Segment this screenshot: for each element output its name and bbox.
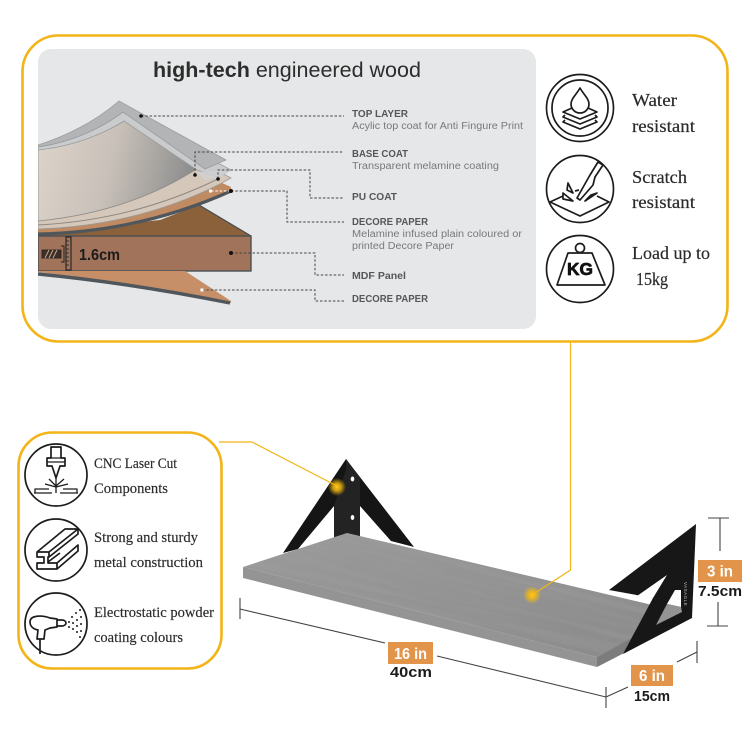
- panel: wood and resistance features: [22, 36, 728, 342]
- dimension label: 1.6cm: [79, 247, 120, 264]
- layer labels: Melamine infused plain coloured or: [352, 229, 523, 240]
- layer labels: BASE COAT: [352, 149, 408, 160]
- dimension: depth: [606, 641, 697, 705]
- layer labels: MDF Panel: [352, 271, 406, 282]
- highlight: bracket hotspot: [328, 478, 346, 496]
- text: water resistant: resistant: [632, 116, 695, 136]
- left bracket: [283, 459, 414, 553]
- dimension: length: [240, 598, 606, 708]
- icon: CNC laser: [25, 444, 87, 506]
- dimension: depth: 15cm: [634, 688, 670, 705]
- text: CNC laser cut: [94, 456, 177, 497]
- text: load capacity: Load up to: [632, 243, 710, 263]
- text: CNC laser cut: Components: [94, 481, 168, 497]
- text: load capacity: [632, 243, 710, 289]
- layer labels: [352, 109, 523, 305]
- connector: wood panel to shelf: [532, 342, 570, 595]
- icon: powder coating gun: [25, 593, 87, 655]
- text: strong and sturdy: Strong and sturdy: [94, 530, 199, 546]
- icon: load weight: KG: [567, 259, 593, 279]
- text: CNC laser cut: CNC Laser Cut: [94, 456, 177, 472]
- dimension: length: 16 in: [394, 646, 427, 663]
- diagram: wood layers cross-section: [38, 101, 251, 303]
- text: scratch resistant: [632, 167, 695, 212]
- dimension: depth: 6 in: [639, 668, 665, 685]
- leader lines: [139, 114, 344, 301]
- icon: scratch resistant: [546, 156, 614, 222]
- text: load capacity: 15kg: [636, 269, 668, 289]
- layer labels: printed Decore Paper: [352, 241, 455, 252]
- layer labels: DECORE PAPER: [352, 217, 429, 228]
- panel: engineered wood layers: [38, 49, 536, 329]
- right bracket: VASAGLE: [683, 582, 688, 606]
- layer labels: DECORE PAPER: [352, 294, 429, 305]
- layer labels: TOP LAYER: [352, 109, 409, 120]
- text: strong and sturdy: [94, 530, 204, 571]
- text: water resistant: Water: [632, 90, 677, 110]
- shelf illustration: [219, 342, 696, 680]
- dimension: height: 7.5cm: [698, 583, 742, 600]
- layer labels: PU COAT: [352, 192, 397, 203]
- dimension: height: 3 in: [707, 564, 733, 580]
- text: strong and sturdy: metal construction: [94, 555, 204, 571]
- panel: metal bracket features: [18, 432, 222, 668]
- heading: high-tech engineered wood: [153, 58, 421, 82]
- connector: bracket callout: [219, 442, 337, 486]
- layer labels: Transparent melamine coating: [352, 161, 499, 172]
- text: scratch resistant: resistant: [632, 192, 695, 212]
- right bracket: [609, 524, 696, 654]
- icon: load weight: [546, 236, 614, 302]
- text: scratch resistant: Scratch: [632, 167, 687, 187]
- dimension: length: 40cm: [390, 664, 432, 681]
- text: electrostatic coating: coating colours: [94, 630, 183, 646]
- icon: water resistant: [546, 74, 614, 142]
- icon: screw and ruler: [42, 237, 71, 270]
- highlight: board hotspot: [523, 586, 541, 604]
- text: water resistant: [632, 90, 695, 136]
- text: electrostatic coating: [94, 605, 214, 646]
- icon: steel beam: [25, 519, 87, 581]
- layer labels: Acylic top coat for Anti Fingure Print: [352, 121, 523, 132]
- shelf board: [243, 533, 650, 667]
- dimension: height: [698, 518, 742, 626]
- text: electrostatic coating: Electrostatic powder: [94, 605, 214, 621]
